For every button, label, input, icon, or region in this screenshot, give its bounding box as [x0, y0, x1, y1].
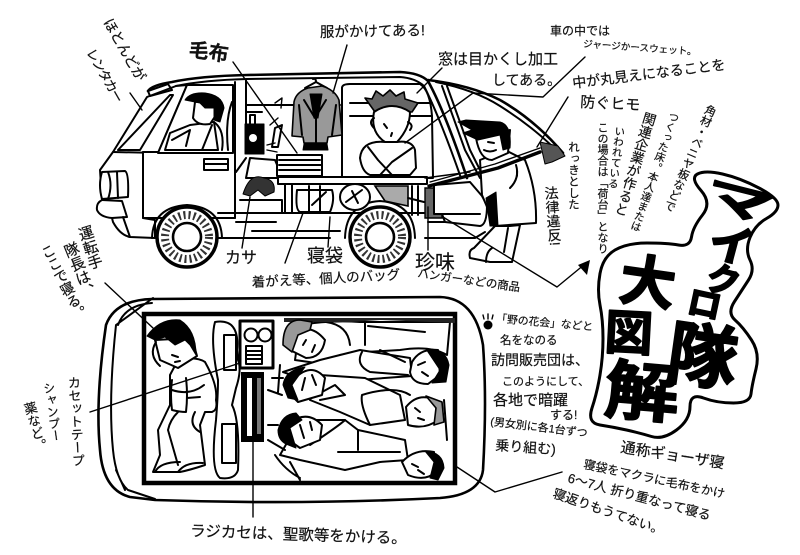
stacked blanket [277, 155, 322, 176]
note: gyoza sleeping: 通称ギョーザ寝 [619, 439, 725, 472]
label: rope that stops view: 中が丸見えになることを [571, 56, 726, 91]
note: door-to-door sales group: 乗り組む) [495, 437, 556, 457]
illustration: van top view [98, 297, 485, 502]
label: blanket: 毛布 [187, 38, 230, 67]
man tying the rope [425, 120, 565, 262]
sleeper head: right middle [406, 396, 444, 427]
title: microbus corps big diagram [591, 171, 779, 437]
label: rope that stops view [571, 56, 726, 114]
floor board and luggage [243, 177, 442, 218]
label: windows are screened: 窓は目かくし加工 [438, 51, 558, 68]
label: jersey in the van [550, 23, 697, 58]
label: mostly rental cars: レンタカー [83, 46, 126, 105]
note: illegal modification columns: この場合は「荷台」となり [596, 122, 608, 254]
labels: umbrella, sleeping bag, delicacies, bags: 着がえ等、個人のバッグ [251, 266, 400, 290]
label: mostly rental cars [83, 16, 149, 105]
label: driver and team leader sleep here [38, 224, 105, 323]
note: door-to-door sales group [483, 312, 594, 457]
title line one: イ [703, 217, 758, 275]
radio cassette on seat [245, 98, 282, 154]
sleeper head: left lower [278, 413, 322, 448]
note: gyoza sleeping: 6〜7人 折り重なって寝る [566, 470, 713, 523]
windshield sweep [111, 298, 155, 499]
labels: umbrella, sleeping bag, delicacies, bags: 珍味 [415, 251, 455, 274]
title line one: ロ [684, 283, 725, 327]
rear bumper and tail [425, 182, 487, 238]
title line two [602, 248, 682, 432]
top view outer body [98, 297, 485, 502]
label: jersey in the van: 車の中では [550, 23, 610, 38]
label: windows are screened: してある。 [492, 72, 561, 88]
labels: umbrella, sleeping bag, delicacies, bags: ハンガーなどの商品 [417, 267, 521, 294]
note: gyoza sleeping [551, 439, 726, 538]
radio cassette top view [241, 372, 264, 442]
woman in curlers [360, 90, 418, 175]
leader lines for van labels [130, 45, 585, 263]
note: door-to-door sales group: する! [550, 408, 577, 422]
note: gyoza sleeping: 寝袋をマクラに毛布をかけ [582, 457, 726, 501]
title line two: 図 [603, 307, 654, 362]
label: clothes hung: 服がかけてある! [320, 22, 425, 41]
label: jersey in the van: ジャージかースウェット。 [583, 39, 697, 58]
label: driver and team leader sleep here: 運転手 [75, 224, 105, 273]
label: rope that stops view: 防ぐヒモ [580, 94, 641, 114]
title line one [662, 171, 779, 401]
label: mostly rental cars: ほとんどが [100, 16, 149, 84]
title line two: 大 [616, 248, 680, 318]
labels: umbrella, sleeping bag, delicacies, bags [225, 246, 521, 294]
jacket on hanger [292, 79, 342, 150]
note: illegal modification columns: いわれている [606, 125, 626, 189]
labels: umbrella, sleeping bag, delicacies, bags: 寝袋 [307, 246, 343, 266]
driver [165, 93, 232, 150]
sleeping driver [147, 320, 216, 472]
note: door-to-door sales group: 各地で暗躍 [493, 392, 568, 409]
title line two: 解 [602, 354, 682, 432]
note: door-to-door sales group: このようにして、 [502, 375, 589, 388]
label: radio plays hymns: ラジカセは、聖歌等をかける。 [190, 522, 407, 548]
title line one: マ [700, 171, 779, 232]
note: door-to-door sales group: 「野の花会」などと [496, 312, 594, 333]
sleeper head: left middle [283, 367, 325, 402]
label: driver and team leader sleep here: ここで寝る。 [38, 241, 90, 323]
leader lines for top view labels [90, 283, 562, 517]
seats and console [213, 321, 273, 478]
van body outline [97, 72, 467, 238]
note: illegal modification columns: 法律違反! [543, 185, 563, 246]
note: illegal modification columns: 関連企業が作ると [611, 110, 658, 218]
cabin frame [144, 314, 455, 483]
title line one: 隊 [662, 314, 742, 401]
note: door-to-door sales group: 訪問販売団は、 [491, 352, 589, 368]
icon: bullet mark [483, 314, 493, 330]
label: cassette tapes, shampoo, medicine: シャンプー [41, 381, 63, 442]
note: illegal modification columns: 角材・ベニヤ板などで [662, 103, 718, 213]
label: cassette tapes, shampoo, medicine [21, 376, 85, 468]
note: illegal modification columns: つくった床。本人達または [628, 110, 681, 233]
note: gyoza sleeping: 寝返りもうてない。 [551, 486, 666, 538]
wheel: front [152, 205, 222, 267]
labels: umbrella, sleeping bag, delicacies, bags: カサ [225, 250, 257, 267]
note: illegal modification columns [543, 103, 718, 254]
sleeper head: right one [410, 349, 449, 384]
wheel: rear [345, 201, 415, 267]
label: driver and team leader sleep here: 隊長は、 [60, 240, 98, 302]
label: windows are screened [438, 51, 561, 88]
note: illegal modification columns: れっきとした [567, 141, 580, 210]
arrow: van points to top view notes [443, 217, 590, 287]
note: door-to-door sales group: (男女別に各1台ずつ [490, 414, 588, 440]
label: cassette tapes, shampoo, medicine: 薬など。 [21, 400, 49, 454]
sleeper head: curly hair [283, 320, 325, 358]
label: cassette tapes, shampoo, medicine: カセットテープ [66, 376, 85, 468]
rear hatch door open [428, 80, 563, 178]
title line one: ク [702, 259, 744, 304]
note: door-to-door sales group: 名をなのる [500, 333, 558, 347]
seats for sleepers: bodies [268, 318, 455, 480]
sleeper head: right lower [402, 451, 444, 480]
title blob outline [591, 172, 778, 437]
illustration: van side view [97, 72, 565, 267]
